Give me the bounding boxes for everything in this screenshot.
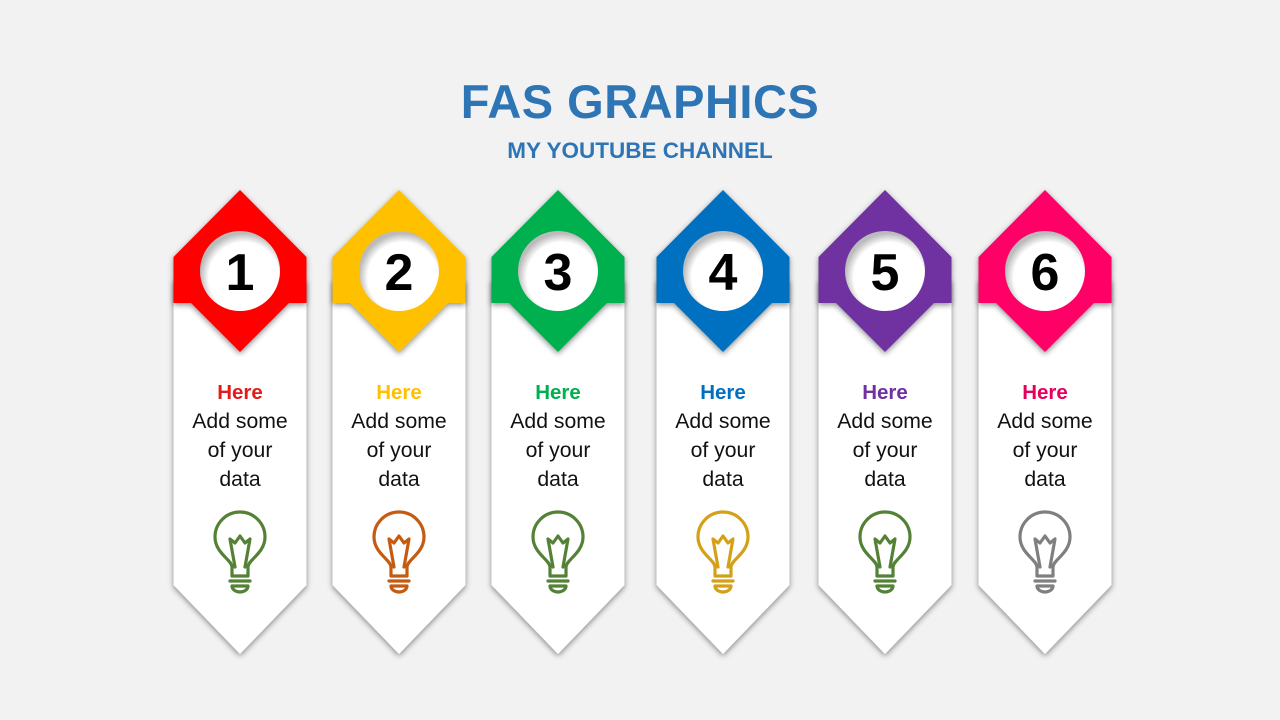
text 6: Add some — [997, 410, 1093, 433]
icon: bulb — [1020, 512, 1070, 592]
number 2: 2 — [385, 244, 413, 302]
icon: bulb — [698, 512, 748, 592]
text 3: Add some — [510, 410, 606, 433]
text 1: Here — [217, 381, 263, 404]
number 1 — [200, 231, 280, 311]
icon: bulb — [533, 512, 583, 592]
text 2 — [351, 381, 447, 491]
text 3: data — [537, 468, 579, 491]
subtitle: MY YOUTUBE CHANNEL — [507, 138, 773, 163]
icon: bulb — [215, 512, 265, 592]
number 5 — [845, 231, 925, 311]
text 6: data — [1024, 468, 1066, 491]
card 5 — [818, 190, 952, 654]
text 6: Here — [1022, 381, 1068, 404]
number 6 — [1005, 231, 1085, 311]
number 4: 4 — [709, 244, 738, 302]
text 1: data — [219, 468, 261, 491]
text 2: Add some — [351, 410, 447, 433]
text 4: Add some — [675, 410, 771, 433]
title: FAS GRAPHICS — [461, 75, 819, 128]
number 3 — [518, 231, 598, 311]
text 5: Here — [862, 381, 908, 404]
text 4 — [675, 381, 771, 491]
text 6: of your — [1013, 439, 1077, 462]
card 3 — [492, 190, 624, 654]
number 6: 6 — [1031, 244, 1059, 302]
number 4 — [683, 231, 763, 311]
number 3: 3 — [544, 244, 572, 302]
text 3: of your — [526, 439, 590, 462]
text 4: data — [702, 468, 744, 491]
text 1: Add some — [192, 410, 288, 433]
card 4 — [656, 190, 790, 654]
card 1 — [174, 190, 306, 654]
text 3 — [510, 381, 606, 491]
text 5 — [837, 381, 933, 491]
text 1: of your — [208, 439, 272, 462]
card 6 — [978, 190, 1112, 654]
icon: bulb — [860, 512, 910, 592]
text 5: data — [864, 468, 906, 491]
text 1 — [192, 381, 288, 491]
text 2: Here — [376, 381, 422, 404]
number 1: 1 — [226, 244, 254, 302]
text 2: data — [378, 468, 420, 491]
number 2 — [359, 231, 439, 311]
text 3: Here — [535, 381, 581, 404]
text 2: of your — [367, 439, 431, 462]
text 4: Here — [700, 381, 746, 404]
text 5: Add some — [837, 410, 933, 433]
number 5: 5 — [871, 244, 899, 302]
card 2 — [332, 190, 466, 654]
text 5: of your — [853, 439, 917, 462]
icon: bulb — [374, 512, 424, 592]
text 4: of your — [691, 439, 755, 462]
text 6 — [997, 381, 1093, 491]
